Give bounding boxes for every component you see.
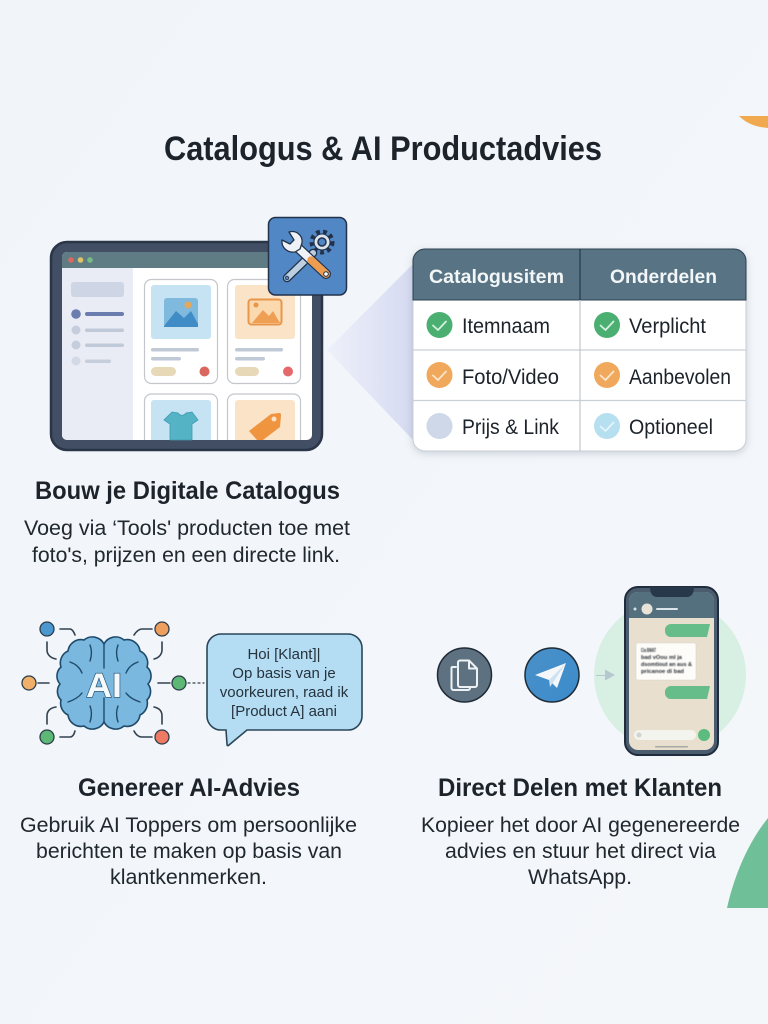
- connectors: [38, 629, 204, 737]
- chat bubble received: [636, 643, 696, 680]
- text: AI advice description: [20, 814, 357, 889]
- text: share description: advies en stuur het direct via: [445, 840, 716, 863]
- table header: [413, 249, 746, 300]
- product card: photo: [228, 280, 300, 384]
- chat bubble received: pricanoe di bad: [641, 669, 684, 675]
- wrench: [296, 246, 326, 274]
- row: Prijs & Link: [426, 413, 713, 439]
- panel: share with customers: [421, 587, 746, 889]
- row: Itemnaam: Verplicht: [629, 315, 706, 338]
- icon: AI brain with nodes: [22, 622, 204, 744]
- heading: build catalogue: Bouw je Digitale Catalogus: [35, 477, 340, 505]
- illustration: tablet with catalogue: [51, 242, 322, 450]
- speech bubble: voorkeuren, raad ik: [220, 684, 349, 701]
- connector fan between tablet and table: [327, 264, 413, 440]
- AI label: AI: [86, 667, 122, 705]
- row: Prijs & Link: Optioneel: [629, 416, 713, 439]
- panel: build catalogue: [24, 218, 413, 567]
- sidebar: [62, 268, 133, 440]
- gear: [312, 232, 332, 252]
- title: Catalogus & AI Productadvies: [164, 130, 602, 168]
- row: Itemnaam: Itemnaam: [462, 315, 550, 338]
- speech bubble: Op basis van je: [232, 665, 336, 682]
- table header: Onderdelen: [610, 267, 717, 288]
- product card: image: [144, 280, 218, 384]
- row: Prijs & Link: Prijs & Link: [462, 416, 559, 439]
- heading: AI advice: Genereer AI-Advies: [78, 774, 300, 802]
- decorative corner: green: [727, 818, 768, 908]
- chat bubble sent: [665, 686, 710, 699]
- chat bubble sent: [665, 624, 710, 637]
- table: catalogue items: [413, 249, 746, 451]
- text: build catalogue description: foto's, prijzen en een directe link.: [32, 544, 340, 567]
- product card: tag: [228, 394, 300, 440]
- text: AI advice description: klantkenmerken.: [110, 866, 267, 889]
- chat bubble received: dsomtiout an aus &: [641, 662, 692, 668]
- table header: Catalogusitem: [429, 267, 564, 288]
- row: Itemnaam: [426, 312, 706, 338]
- text: share description: WhatsApp.: [528, 866, 632, 889]
- icon: phone with chat: [594, 587, 746, 755]
- row: Foto/Video: Foto/Video: [462, 366, 559, 389]
- panel: AI advice: [20, 622, 362, 889]
- speech bubble: [207, 634, 362, 746]
- icon: tools badge: [268, 218, 346, 295]
- text: build catalogue description: Voeg via ‘Tools' producten toe met: [24, 517, 350, 540]
- text: share description: [421, 814, 740, 889]
- speech bubble: [Product A] aani: [231, 703, 337, 720]
- row: Foto/Video: Aanbevolen: [629, 366, 731, 389]
- brain: [57, 637, 151, 729]
- product card: shirt: [144, 394, 218, 440]
- text: AI advice description: berichten te maken op basis van: [36, 840, 342, 863]
- heading: share: Direct Delen met Klanten: [438, 774, 722, 802]
- chat bubble received: bad vOou ml ja: [641, 655, 683, 661]
- input bar: [634, 729, 710, 748]
- text: share description: Kopieer het door AI gegenereerde: [421, 814, 740, 837]
- nodes: [22, 622, 186, 744]
- row: Foto/Video: [426, 362, 731, 389]
- text: build catalogue description: [24, 517, 350, 567]
- screwdriver: [287, 253, 313, 278]
- chat bubble received: Cia BMAT: [641, 648, 656, 654]
- decorative corner: orange: [739, 116, 768, 128]
- arrow: [596, 670, 615, 680]
- icon: send: [525, 648, 579, 702]
- text: AI advice description: Gebruik AI Toppers om persoonlijke: [20, 814, 357, 837]
- speech bubble: Hoi [Klant]|: [247, 646, 321, 663]
- icon: copy: [438, 648, 492, 702]
